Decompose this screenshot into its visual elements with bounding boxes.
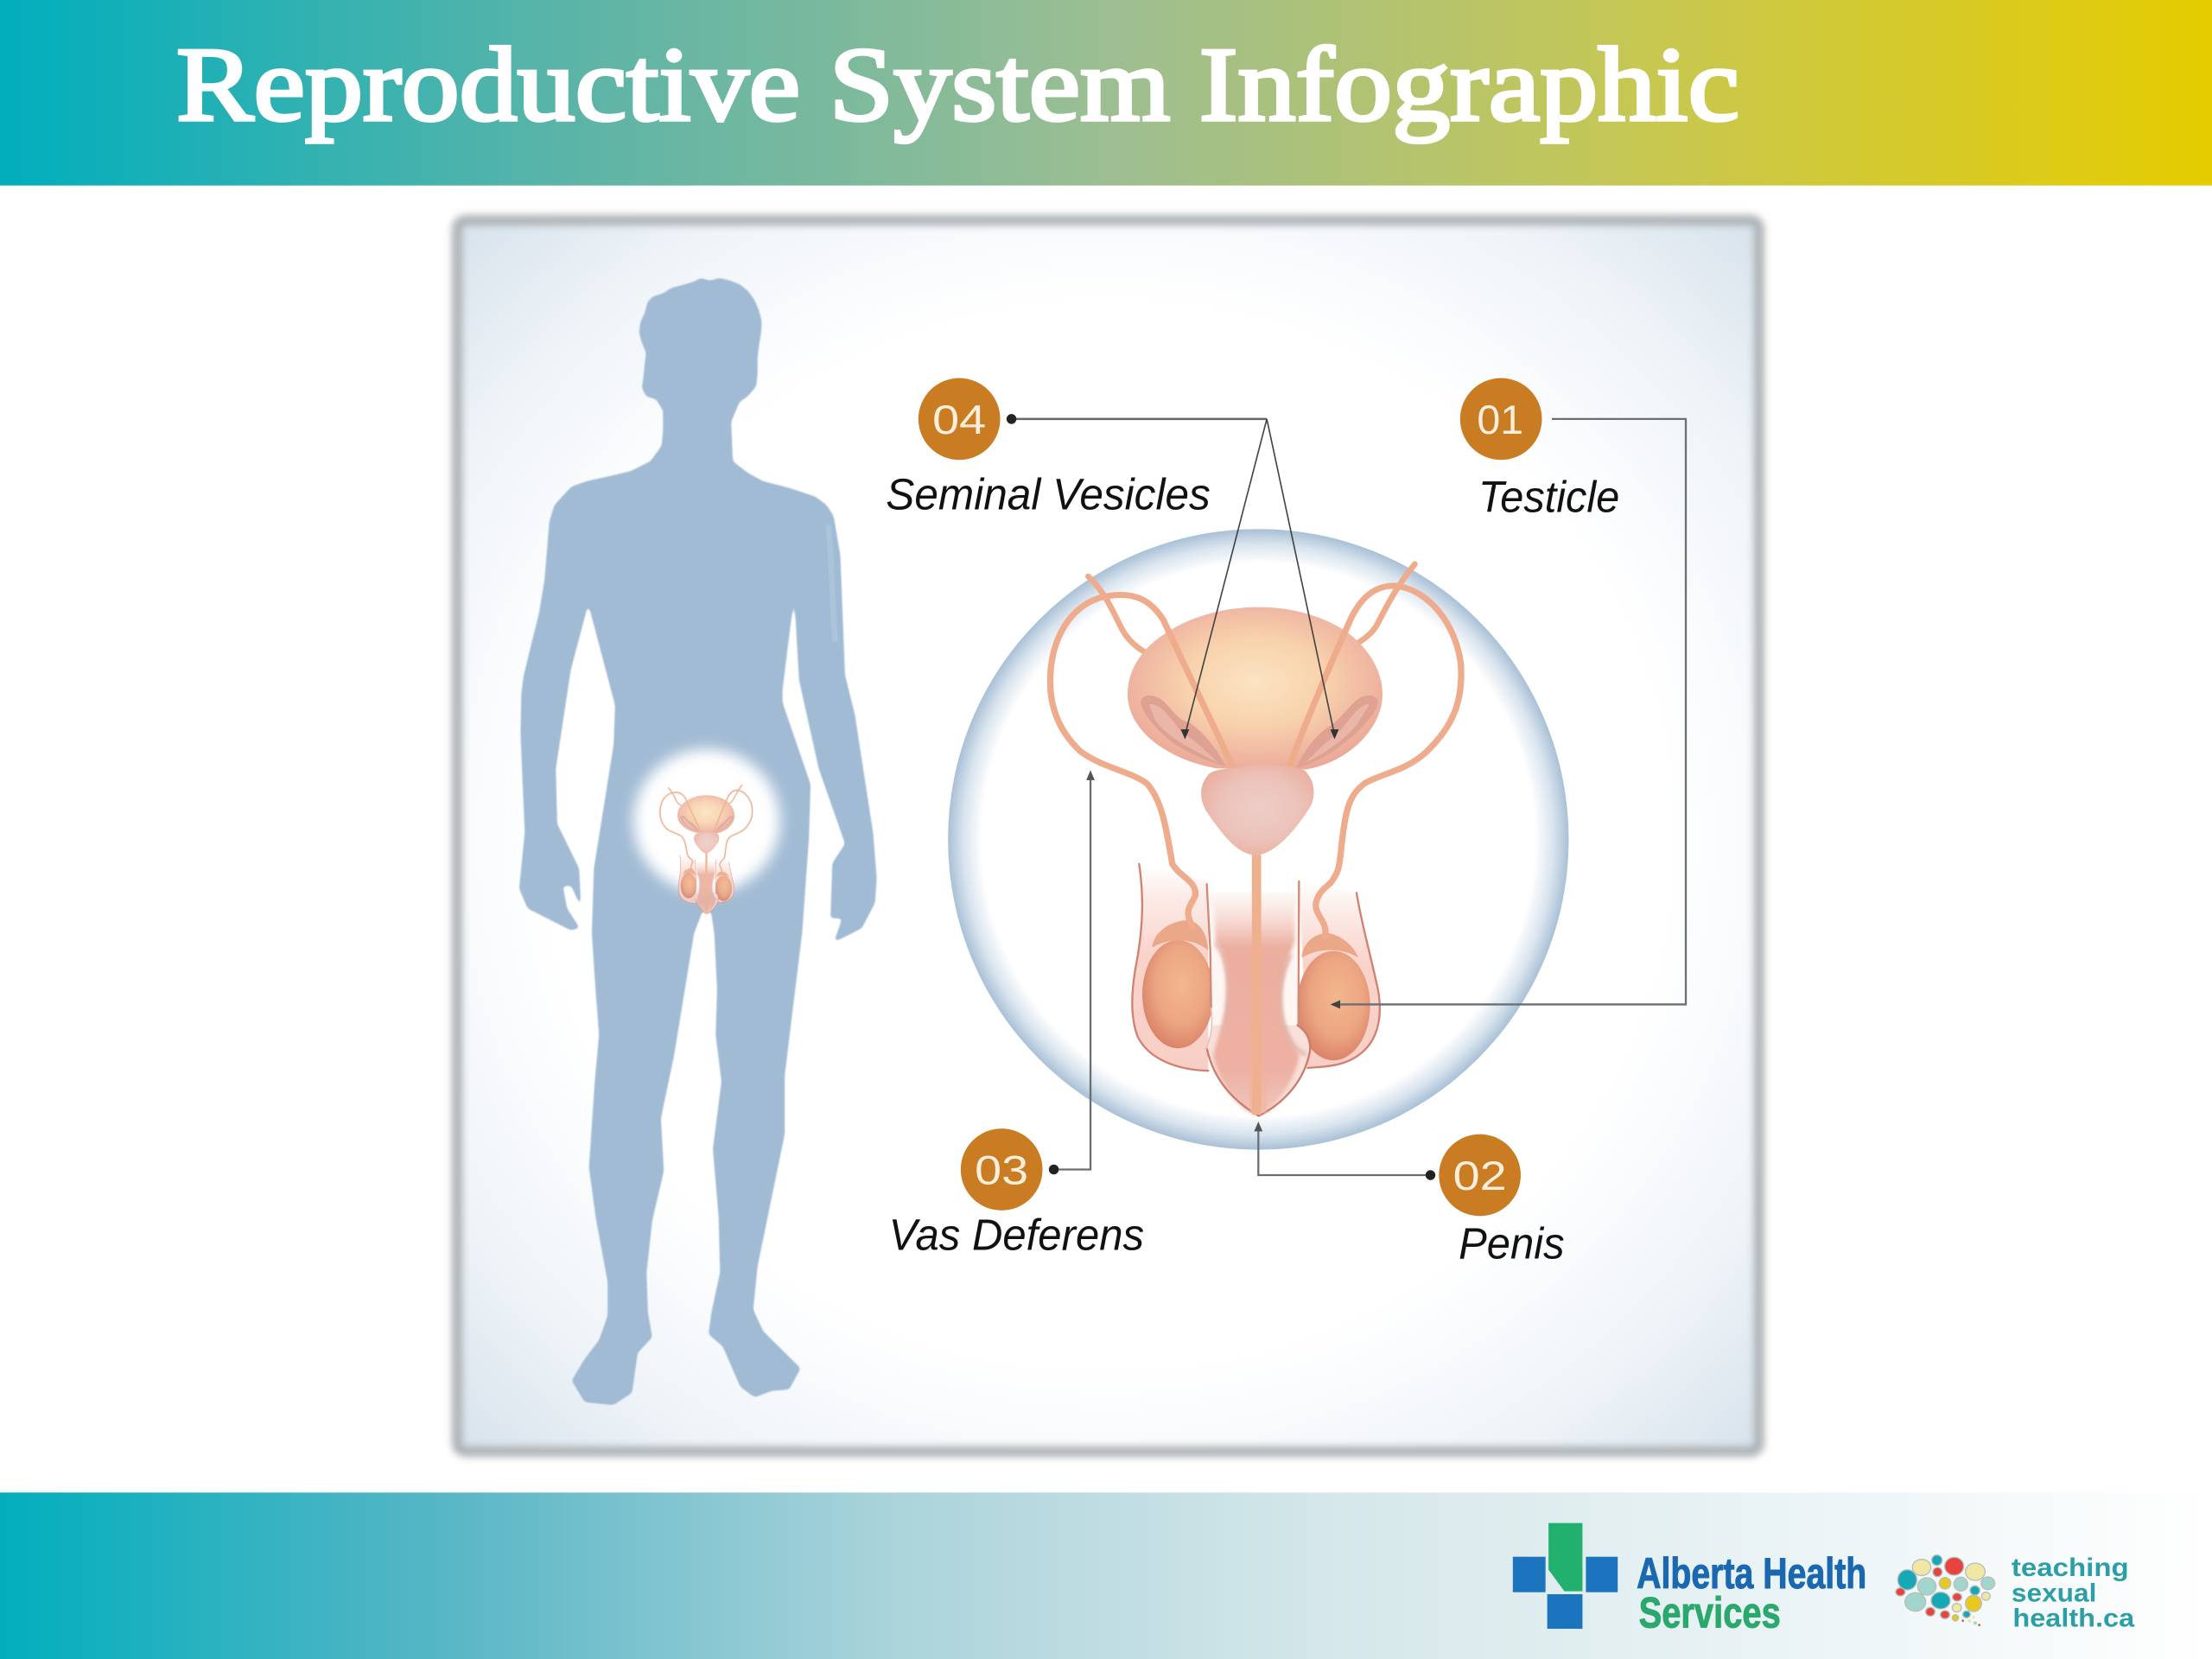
logo text: Alberta Health Services — [1637, 1550, 1866, 1637]
logo text: teaching sexual health.ca: teaching — [2012, 1553, 2129, 1581]
label: penis: Penis — [1459, 1218, 1565, 1268]
logo text: teaching sexual health.ca — [2012, 1553, 2134, 1632]
logo: brain of dots — [1896, 1555, 1995, 1626]
badge 04 with label: 04 — [932, 397, 986, 443]
callout 01 leader — [1331, 419, 1686, 1008]
anatomy diagram — [1050, 564, 1461, 1116]
logo text: teaching sexual health.ca: health.ca — [2012, 1604, 2134, 1632]
callout 04 leader — [1007, 414, 1338, 740]
body silhouette — [519, 278, 877, 1405]
callout 02 leader — [1254, 1122, 1435, 1180]
label: seminal vesicles: Seminal Vesicles — [886, 469, 1211, 518]
badge 02 with label: 02 — [1453, 1154, 1507, 1199]
badge 04 with label — [886, 378, 1211, 518]
callout 03 leader — [1049, 770, 1095, 1174]
logo text: Alberta Health Services: Alberta Health — [1637, 1550, 1866, 1598]
footer band — [0, 1492, 2212, 1659]
logo text: Alberta Health Services: Services — [1639, 1589, 1781, 1637]
logo: AHS cross — [1513, 1523, 1618, 1629]
badge 03 with label — [889, 1128, 1144, 1260]
title: Reproductive System Infographic — [176, 27, 1739, 143]
label: testicle: Testicle — [1478, 473, 1619, 522]
highlight glow — [633, 749, 780, 893]
badge 01 with label — [1460, 378, 1619, 522]
label: vas deferens: Vas Deferens — [889, 1211, 1144, 1260]
badge 01 with label: 01 — [1477, 397, 1523, 443]
badge 03 with label: 03 — [975, 1148, 1028, 1194]
header band — [0, 0, 2212, 186]
logo text: teaching sexual health.ca: sexual — [2012, 1579, 2096, 1607]
badge 02 with label — [1439, 1135, 1565, 1268]
mini anatomy — [660, 785, 753, 914]
anatomy bubble — [948, 529, 1569, 1150]
logos — [1513, 1523, 2134, 1637]
panel: illustration frame — [457, 220, 1759, 1452]
